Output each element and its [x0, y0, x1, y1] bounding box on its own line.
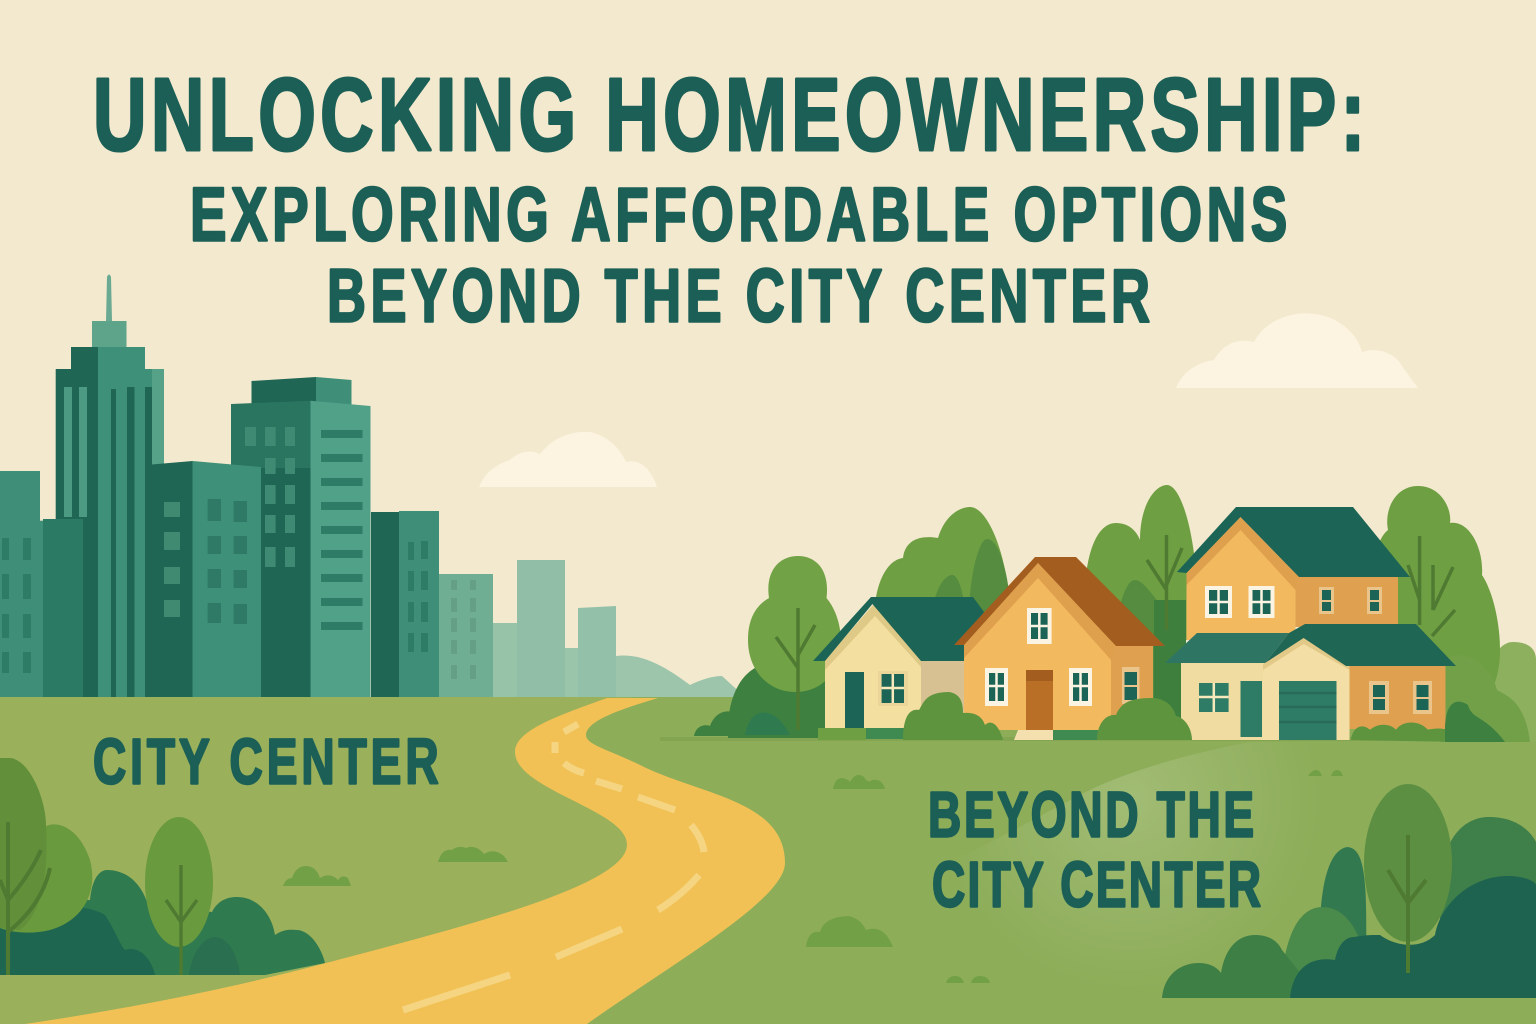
beyond the city center label: CITY CENTER — [932, 849, 1261, 920]
short right building — [371, 511, 439, 697]
cluster left of house — [728, 664, 825, 738]
tall right building — [231, 377, 370, 697]
city skyline — [0, 274, 745, 697]
left round tree — [748, 556, 841, 692]
roof — [954, 557, 1165, 646]
upper roof — [1177, 507, 1410, 577]
upper windows — [1205, 586, 1382, 618]
small bushes: left field — [283, 847, 508, 886]
title: UNLOCKING HOMEOWNERSHIP: — [93, 58, 1365, 173]
cluster right — [1373, 486, 1500, 720]
right windows — [1369, 681, 1432, 714]
window — [878, 671, 908, 706]
house: right two storey — [1165, 507, 1456, 740]
cloud: right — [1176, 313, 1418, 388]
tree group: lower left — [0, 758, 325, 975]
road — [25, 698, 785, 1024]
title: EXPLORING AFFORDABLE OPTIONS — [190, 173, 1287, 258]
middle building — [146, 461, 261, 697]
dark foreground bush — [1290, 876, 1536, 998]
trunk — [1388, 835, 1426, 973]
beyond the city center label: BEYOND THE — [928, 779, 1254, 850]
house: left cottage — [813, 597, 984, 728]
trees behind houses — [694, 485, 1536, 742]
tree middle — [145, 817, 213, 947]
hill far right — [1482, 642, 1536, 742]
beyond the city center label — [928, 779, 1261, 920]
left window — [1199, 683, 1229, 712]
cluster behind houses — [874, 507, 1012, 640]
city center label: CITY CENTER — [93, 726, 439, 797]
spire tower — [56, 274, 164, 697]
left tall building — [0, 471, 40, 531]
title — [93, 58, 1365, 338]
small bushes: right field — [806, 770, 1343, 983]
door — [1240, 681, 1262, 737]
foreground shrubs — [818, 692, 1505, 742]
pointed tree — [1364, 784, 1452, 942]
tree group: lower right — [1162, 784, 1536, 998]
left block — [0, 519, 83, 697]
top window — [1027, 608, 1052, 644]
title: BEYOND THE CITY CENTER — [327, 254, 1150, 338]
lower roof — [1165, 624, 1456, 666]
roof — [813, 597, 984, 661]
lower windows — [985, 668, 1092, 706]
ground — [0, 697, 1536, 1024]
house: center — [954, 557, 1165, 740]
door — [845, 672, 864, 728]
tree left large — [0, 758, 92, 933]
distant buildings — [439, 560, 745, 697]
step — [1014, 730, 1053, 740]
cloud: center — [479, 432, 657, 487]
door — [1026, 670, 1053, 730]
garage — [1279, 681, 1336, 740]
side window — [1122, 667, 1140, 704]
lower body — [1181, 660, 1265, 740]
